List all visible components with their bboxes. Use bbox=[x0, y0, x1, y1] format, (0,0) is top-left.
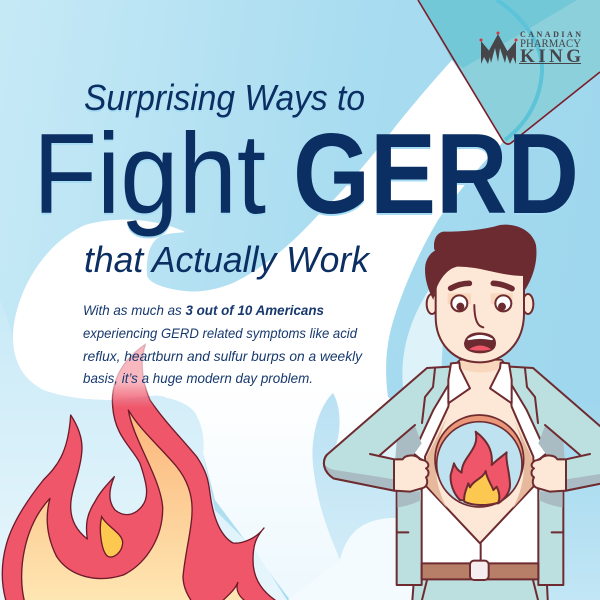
intro paragraph: reflux, heartburn and sulfur burps on a weekly bbox=[83, 348, 363, 364]
mouth bbox=[465, 333, 495, 352]
white swoosh bbox=[13, 60, 505, 600]
flame large bbox=[2, 344, 280, 600]
title line 1: Surprising Ways to bbox=[84, 77, 365, 118]
ear left bbox=[427, 294, 437, 314]
intro paragraph: basis, it’s a huge modern day problem. bbox=[83, 370, 313, 386]
eye shadows bbox=[448, 293, 513, 304]
ring and flame bbox=[435, 415, 524, 507]
flame drop bbox=[100, 517, 123, 557]
chest flame yellow bbox=[464, 471, 499, 505]
inner lighter band bbox=[402, 285, 445, 400]
flame outer bbox=[2, 344, 280, 600]
ear right bbox=[523, 294, 533, 314]
flame inner bbox=[22, 410, 193, 600]
jacket left and hand bbox=[324, 363, 470, 585]
flame inner tip bbox=[220, 582, 248, 600]
intro paragraph: experiencing GERD related symptoms like acid bbox=[83, 325, 358, 341]
logo text: PHARMACY bbox=[520, 36, 581, 50]
intro paragraph bbox=[83, 302, 363, 386]
trousers bbox=[412, 578, 548, 600]
chest flame red bbox=[451, 432, 510, 503]
intro paragraph: With as much as 3 out of 10 Americans bbox=[83, 302, 324, 318]
belt bbox=[422, 563, 538, 579]
nose bbox=[474, 305, 483, 327]
face bbox=[436, 266, 524, 362]
eyebrows bbox=[451, 283, 512, 289]
logo panel bbox=[418, 0, 600, 144]
shirt placket bbox=[478, 543, 484, 563]
chest shading bbox=[426, 361, 532, 508]
cloud bottom bbox=[288, 518, 420, 600]
lighter lower right wash bbox=[400, 400, 600, 600]
chest opening bbox=[425, 360, 533, 543]
logo text: KING bbox=[520, 46, 581, 67]
icon: crown bbox=[480, 32, 518, 64]
pale flame shape behind arm bbox=[312, 393, 400, 560]
man illustration bbox=[324, 225, 600, 600]
logo text bbox=[519, 30, 581, 67]
shirt bbox=[413, 370, 547, 565]
title Fight: Fight bbox=[33, 111, 266, 238]
jacket right and hand bbox=[490, 363, 600, 585]
pale blue wave left bbox=[0, 300, 287, 600]
trouser creases bbox=[422, 580, 538, 600]
title line 3: that Actually Work bbox=[84, 239, 371, 280]
hair bbox=[425, 225, 536, 300]
belt buckle bbox=[470, 561, 489, 580]
eyes bbox=[451, 295, 511, 311]
head bbox=[425, 225, 536, 362]
brand logo bbox=[480, 30, 581, 67]
logo text: CANADIAN bbox=[520, 30, 581, 39]
